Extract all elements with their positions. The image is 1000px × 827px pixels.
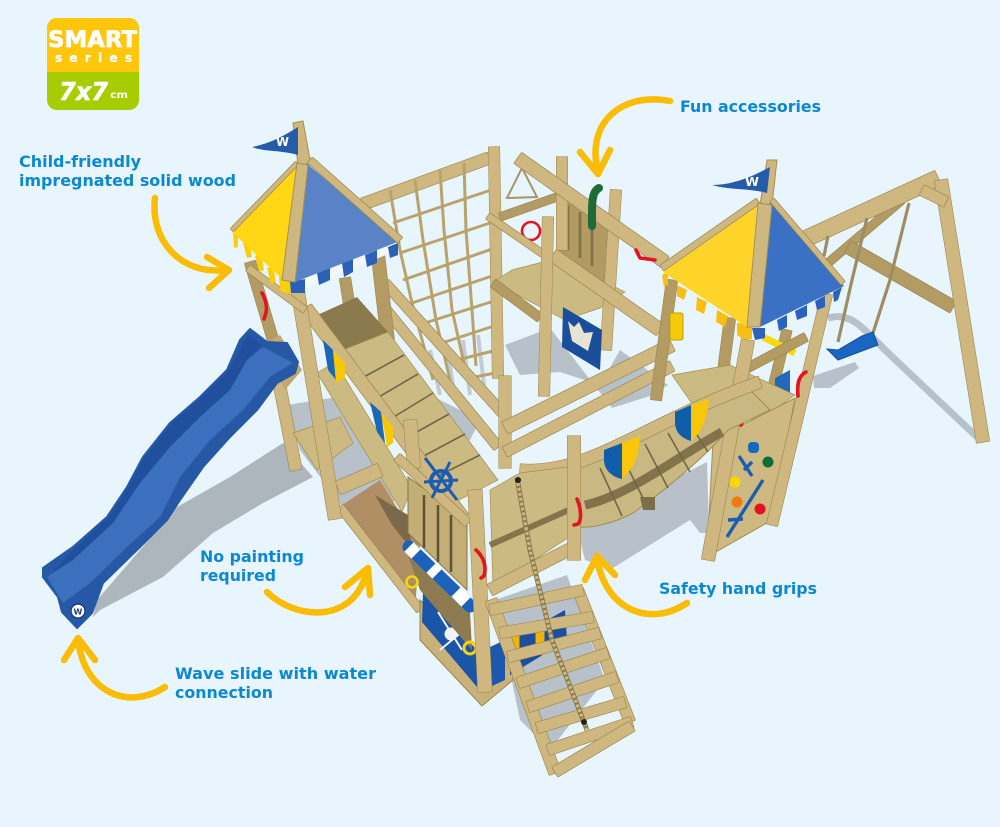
ladder rails — [491, 600, 555, 773]
flag: W — [745, 175, 759, 189]
slide deck edge — [262, 335, 302, 390]
tower floor — [672, 365, 795, 420]
upper dark floor — [313, 297, 388, 350]
swing leg — [941, 180, 983, 442]
roof centre beam — [282, 163, 308, 282]
flag pole — [293, 121, 311, 165]
roof yellow face — [663, 205, 757, 327]
ramp planks — [343, 332, 498, 503]
roof centre beam — [747, 203, 772, 327]
yellow stripes — [515, 620, 540, 668]
panels seen through ramp — [510, 610, 567, 675]
climbing rope — [515, 477, 587, 730]
slide logo: W — [74, 608, 82, 616]
bridge plank shadows — [585, 432, 722, 505]
platform floor — [493, 258, 625, 320]
platform underside rail — [493, 283, 540, 318]
shield two — [370, 402, 393, 447]
callout: fun accessories — [580, 97, 821, 174]
swing seat and ropes — [824, 203, 909, 360]
front left post — [298, 292, 335, 519]
red grip tower lower — [741, 407, 745, 425]
tall post — [544, 217, 548, 396]
ramp ladder — [490, 477, 632, 773]
white under-roof band — [295, 243, 398, 290]
centre front rails — [383, 283, 672, 468]
mid beam — [338, 470, 380, 488]
striped awning — [409, 547, 470, 606]
callout: wave slide: Wave slide with water — [175, 664, 376, 683]
flag — [712, 167, 770, 193]
yellow ring left — [406, 576, 418, 588]
centre deck — [490, 467, 580, 587]
callout: wave slide — [64, 638, 376, 702]
shield right — [675, 399, 709, 441]
ladder planks — [490, 590, 632, 772]
shield left — [604, 436, 640, 479]
climbing holds — [730, 442, 774, 514]
swing bracket — [922, 190, 946, 202]
red hand grip far — [636, 250, 655, 260]
swing top beam — [803, 178, 938, 240]
flag: W — [276, 135, 289, 149]
platform side rail — [488, 216, 543, 254]
base frame — [420, 600, 513, 706]
slatted wall — [408, 477, 467, 590]
red grip right — [574, 499, 581, 525]
right roof — [662, 160, 844, 340]
stub post — [410, 420, 414, 468]
swing frame — [803, 178, 983, 442]
ground shadows — [93, 317, 977, 750]
green hand grip — [592, 188, 599, 226]
blue wave slide — [43, 329, 298, 628]
bridge planks — [500, 385, 770, 527]
ship wheel — [424, 458, 458, 500]
slide logo — [71, 604, 85, 618]
top rail — [518, 158, 665, 262]
slatted wall — [558, 185, 612, 290]
wood band under awning — [408, 555, 472, 650]
low deck — [293, 417, 353, 470]
flag pole — [760, 160, 777, 205]
bridge to right tower — [500, 382, 770, 527]
badge: Smart series 7x7 cm — [47, 18, 139, 110]
badge: Smart series 7x7 cm: cm — [110, 90, 128, 101]
callout: safety hand grips — [585, 556, 817, 614]
red grip left tower — [262, 293, 266, 319]
left roof — [232, 121, 400, 293]
lower deck slats — [317, 362, 412, 512]
yellow ring right — [464, 642, 476, 654]
yellow box — [670, 313, 683, 340]
front tower — [397, 436, 581, 706]
ramp rail — [306, 308, 463, 518]
callout: safety hand grips: Safety hand grips — [659, 579, 817, 598]
wall post — [556, 157, 568, 250]
swing cross brace — [848, 247, 953, 307]
badge: Smart series 7x7 cm: series — [55, 51, 132, 65]
rear posts — [345, 278, 350, 310]
right tower — [656, 280, 827, 560]
roof right rim — [772, 200, 843, 283]
long beam — [553, 255, 660, 330]
platform beam — [500, 197, 557, 217]
blue block — [775, 370, 790, 395]
tower rail — [740, 337, 806, 372]
badge: Smart series 7x7 cm: 7x7 — [59, 77, 109, 106]
left tower structure — [248, 255, 498, 610]
callout: no painting required — [200, 547, 370, 612]
climbing wall — [707, 398, 795, 557]
roof fringe — [233, 232, 295, 293]
tower front post — [708, 340, 748, 560]
red grip tower upper — [798, 372, 806, 396]
wall rail — [397, 457, 468, 523]
blue swords — [727, 456, 763, 537]
bridge rail — [520, 382, 760, 470]
pirate panel — [422, 592, 477, 687]
deck beam shadow — [490, 505, 580, 545]
roof blue face — [295, 163, 400, 282]
yellow tube — [763, 337, 795, 353]
sand pit beam — [340, 507, 420, 610]
roof fringe — [662, 272, 752, 339]
roof yellow face — [232, 166, 297, 280]
callout: fun accessories: Fun accessories — [680, 97, 821, 116]
trapeze bar — [507, 168, 537, 198]
tower back posts — [656, 280, 672, 400]
red grip on post — [476, 550, 485, 578]
net post — [494, 147, 498, 378]
tower right post — [772, 294, 827, 525]
deck front beam — [490, 545, 578, 590]
callout: no painting required: No painting — [200, 547, 304, 566]
roof left rim — [232, 163, 297, 230]
callout: wave slide: connection — [175, 683, 273, 702]
front post — [475, 490, 485, 692]
callout: child-friendly wood — [19, 152, 236, 288]
callout: no painting required: required — [200, 566, 276, 585]
swing far brace — [828, 200, 902, 263]
roof right rim — [310, 160, 400, 240]
roof blue face — [760, 202, 844, 327]
sand shadow — [375, 495, 412, 550]
crown panel — [562, 307, 602, 370]
wall post right — [606, 190, 616, 350]
deck right post — [568, 436, 580, 560]
rope climbing net — [363, 147, 500, 380]
bridge posts — [640, 497, 655, 510]
shield one — [323, 340, 345, 383]
red steering wheel — [522, 222, 540, 240]
callout: child-friendly wood: impregnated solid wood — [19, 171, 236, 190]
flag — [252, 127, 298, 155]
badge: Smart series 7x7 cm: SMART — [48, 28, 137, 53]
sand pit — [342, 480, 420, 608]
front tower rail upper — [248, 268, 305, 310]
callout: child-friendly wood: Child-friendly — [19, 152, 142, 171]
upper centre platform — [488, 157, 665, 396]
roof left rim — [662, 201, 758, 268]
blue side panel — [490, 640, 505, 687]
